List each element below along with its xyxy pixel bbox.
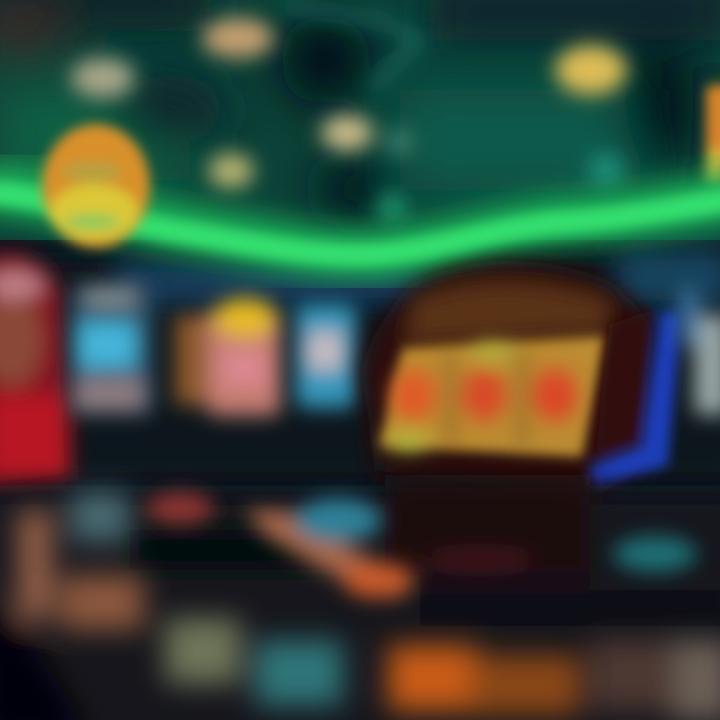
cabinet [362, 262, 652, 500]
far right machine [680, 290, 720, 415]
large slot machine [362, 262, 682, 500]
slot machine: light blue [296, 304, 356, 408]
reels [380, 336, 606, 458]
round orange sign [42, 124, 150, 248]
slot machine: left blue [70, 285, 154, 415]
right orange sign [706, 85, 720, 186]
lower dark room band [0, 250, 720, 482]
neon green band [0, 188, 720, 255]
ceiling background [0, 0, 720, 240]
red figure on left [0, 252, 72, 490]
floor reflections [0, 492, 720, 720]
blue side panel [588, 310, 682, 488]
counter objects [146, 492, 697, 600]
ceiling lights [71, 18, 627, 224]
floor [0, 475, 720, 720]
slot machine: centre yellow and pink [175, 298, 281, 416]
